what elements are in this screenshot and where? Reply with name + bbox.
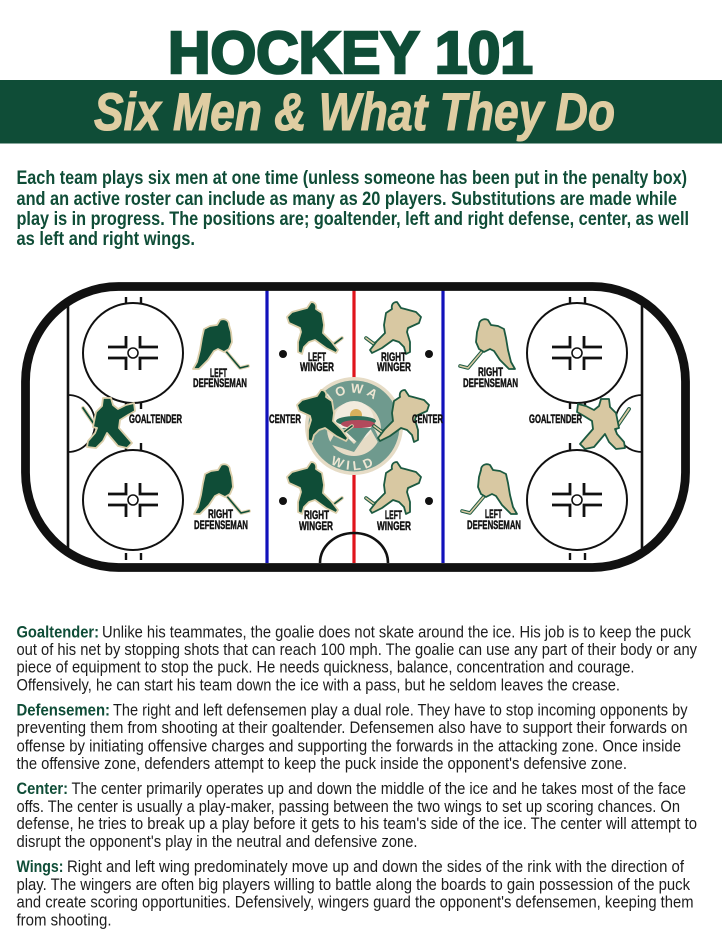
text block: defensemen	[16, 701, 688, 773]
player: center, green	[269, 390, 352, 442]
player: right goaltender, tan: GOALTENDER	[529, 412, 582, 426]
intro paragraph: as left and right wings.	[16, 229, 195, 250]
player: left defenseman, tan: LEFT	[485, 507, 502, 521]
player: right winger, tan	[366, 302, 421, 374]
rink lines	[26, 286, 686, 568]
player: right winger, tan: RIGHT	[381, 350, 406, 364]
title: HOCKEY 101	[168, 20, 533, 86]
player: right defenseman, tan	[460, 319, 518, 390]
text block: goaltender: Offensively, he can start his team down the ice with a pass, but he seldom leaves the crease.	[16, 676, 620, 695]
player: left defenseman, green	[193, 319, 248, 390]
player: left goaltender, green: GOALTENDER	[129, 412, 182, 426]
player: right goaltender, tan	[529, 399, 629, 449]
player: left defenseman, green: DEFENSEMAN	[193, 376, 247, 390]
player: right winger, green: WINGER	[299, 519, 333, 533]
player: left defenseman, tan	[462, 464, 521, 532]
text block: center: Center:	[16, 779, 68, 798]
player: right defenseman, tan: RIGHT	[478, 365, 503, 379]
player: center, green: CENTER	[269, 412, 301, 426]
player: left winger, green: LEFT	[308, 350, 326, 364]
player: right winger, green	[287, 462, 342, 533]
player: right winger, tan: WINGER	[377, 360, 411, 374]
intro paragraph	[16, 168, 689, 250]
Iowa Wild center logo: WILD	[332, 456, 372, 470]
player: left winger, green	[287, 302, 342, 374]
faceoff circle: bottom left	[83, 450, 183, 550]
hockey rink diagram	[21, 282, 690, 572]
player: right defenseman, green: RIGHT	[208, 507, 233, 521]
text block: center: disrupt the opponent's play in the neutral and defensive zone.	[16, 832, 418, 851]
text block: defensemen: Defensemen:	[16, 701, 110, 720]
player: left defenseman, green: LEFT	[210, 366, 227, 380]
player: left goaltender, green	[83, 398, 182, 448]
player: left winger, tan	[366, 462, 421, 533]
player: center, tan: CENTER	[412, 412, 443, 426]
text block: goaltender: Goaltender:	[16, 622, 99, 642]
text block: wings: Wings:	[16, 857, 64, 876]
subtitle banner	[0, 80, 722, 144]
text block: goaltender: piece of equipment to stop the puck. He needs quickness, balance, concentration and courage.	[16, 658, 634, 677]
player: left winger, tan: LEFT	[385, 508, 402, 522]
text block: wings: from shooting.	[16, 911, 112, 930]
text block: goaltender	[16, 622, 697, 695]
player: left winger, green: WINGER	[300, 360, 334, 374]
player: right defenseman, tan: DEFENSEMAN	[463, 376, 518, 390]
player: center, tan	[374, 390, 443, 442]
player: right winger, green: RIGHT	[304, 508, 329, 522]
rink boards	[26, 286, 686, 568]
player: left winger, tan: WINGER	[377, 519, 411, 533]
Iowa Wild center logo: IOWA	[327, 383, 376, 401]
player: left defenseman, tan: DEFENSEMAN	[467, 518, 521, 532]
Iowa Wild center logo	[305, 377, 403, 475]
text block: wings	[16, 857, 694, 930]
faceoff circle: top left	[83, 303, 183, 403]
text block: center	[16, 779, 697, 851]
faceoff circle: top right	[527, 303, 627, 403]
text block: defensemen: the offensive zone, defenders attempt to keep the puck inside the opponent's defensive zone.	[16, 754, 627, 773]
player: right defenseman, green: DEFENSEMAN	[194, 518, 248, 532]
player: right defenseman, green	[194, 464, 249, 532]
faceoff circle: bottom right	[527, 450, 627, 550]
subtitle: Six Men & What They Do	[94, 83, 615, 142]
